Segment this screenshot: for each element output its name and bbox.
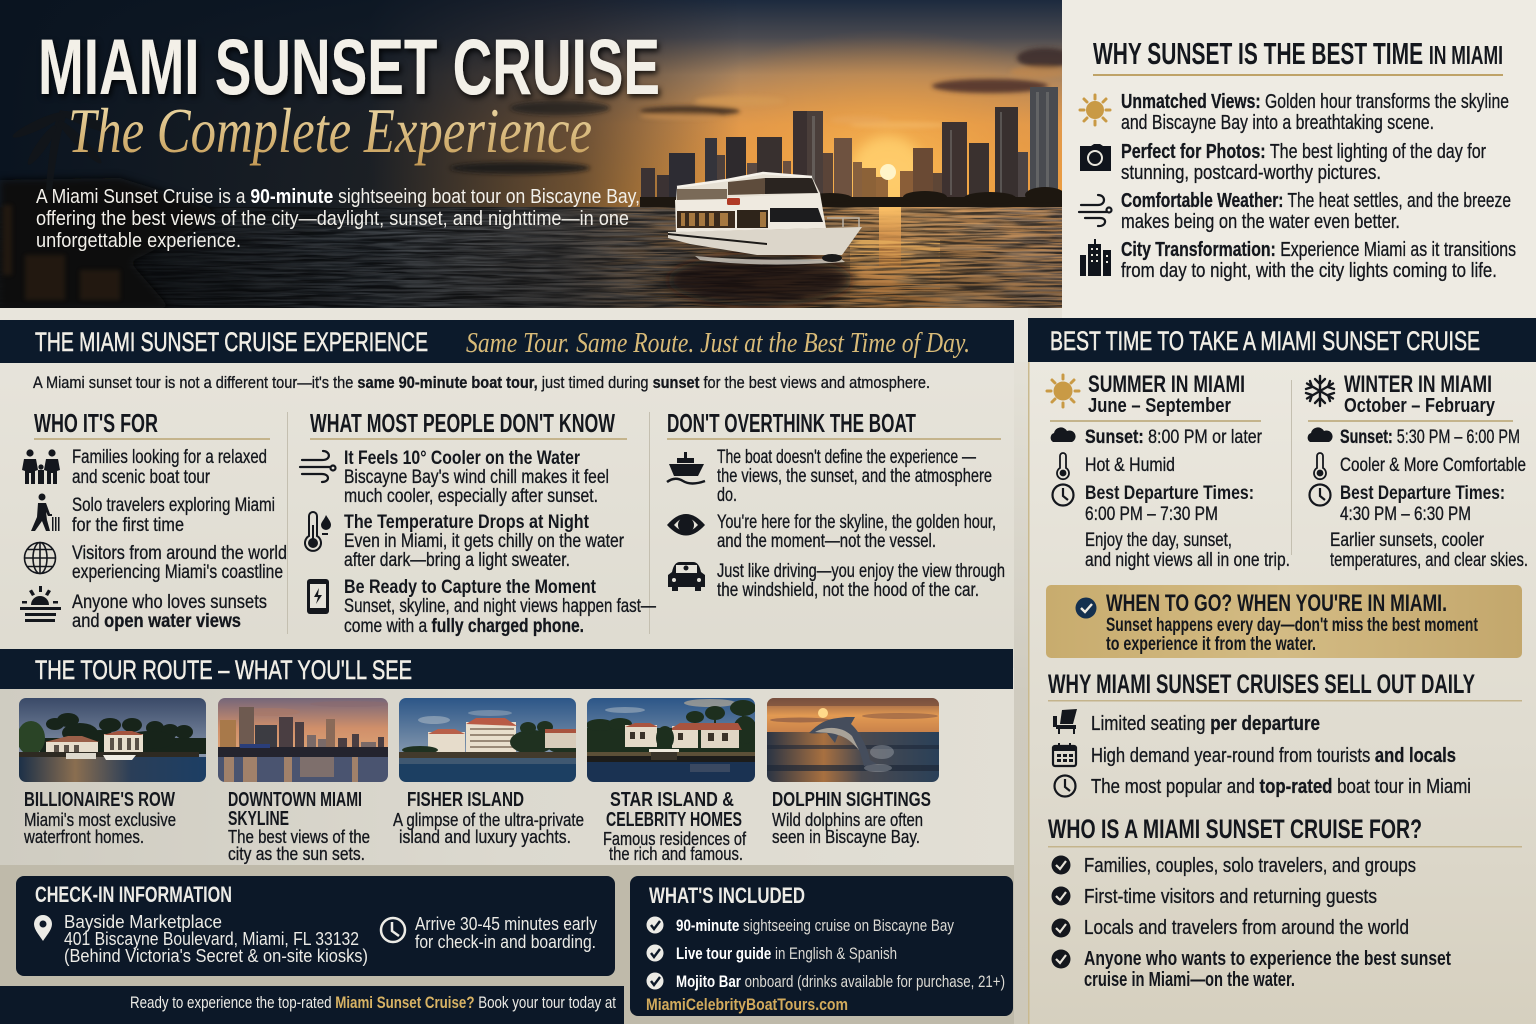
- icon: thermometer: [1057, 453, 1069, 479]
- heading: October – February: [1344, 395, 1496, 417]
- text: just like driving: Just like driving—you enjoy the view through: [717, 561, 1005, 582]
- footer call to action: Ready to experience the top-rated Miami Sunset Cruise? Book your tour today at: [130, 993, 616, 1012]
- photo: dolphin sightings: [767, 698, 939, 782]
- text: cooler on water: much cooler, especially after sunset.: [344, 486, 598, 507]
- item: 90-minute cruise: 90-minute sightseeing cruise on Biscayne Bay: [676, 916, 954, 935]
- text: here for the skyline: and the moment—not the vessel.: [717, 531, 936, 552]
- column: what most people don't know: [300, 408, 656, 637]
- item: unmatched views: and Biscayne Bay into a breathtaking scene.: [1121, 112, 1434, 134]
- icon: clock: [381, 918, 405, 942]
- item: comfortable weather: [1121, 190, 1511, 233]
- bay water: [0, 207, 1062, 308]
- text: capture the moment: come with a fully charged phone.: [344, 616, 584, 637]
- photo: downtown miami skyline: [218, 698, 390, 782]
- subtitle script: The Complete Experience: [68, 95, 592, 166]
- heading: [1308, 371, 1513, 422]
- column heading: DON'T OVERTHINK THE BOAT: [667, 408, 916, 438]
- heading: June – September: [1088, 395, 1231, 417]
- section header: [0, 320, 1014, 363]
- icon: wind: [300, 451, 336, 482]
- text: visitors: Visitors from around the world: [72, 543, 287, 564]
- arrival note: [415, 914, 597, 952]
- caption: star island: [603, 789, 747, 864]
- item: perfect for photos: stunning, postcard-worthy pictures.: [1121, 162, 1381, 184]
- icon: sun: [1080, 95, 1110, 125]
- column: don't overthink the boat: [667, 408, 1005, 601]
- text: capture the moment: [344, 577, 656, 637]
- caption: billionaire's row: Miami's most exclusive: [24, 810, 176, 830]
- text: boat doesn't define: The boat doesn't define the experience —: [717, 447, 976, 468]
- photo: star island: [586, 698, 757, 782]
- caption: fisher island: A glimpse of the ultra-private: [393, 810, 584, 830]
- intro paragraph: unforgettable experience.: [36, 230, 241, 252]
- intro paragraph: [36, 186, 640, 252]
- column: winter: [1306, 371, 1528, 571]
- column heading: WHO IT'S FOR: [34, 408, 158, 438]
- text: boat doesn't define: [717, 447, 992, 506]
- text: visitors: [72, 543, 287, 583]
- column: summer: [1047, 371, 1290, 571]
- intro paragraph: A Miami Sunset Cruise is a 90-minute sightseeing boat tour on Biscayne Bay,: [36, 186, 640, 208]
- wake: [695, 256, 845, 265]
- callout: when to go: [1046, 585, 1522, 658]
- panel: why sunset is the best time: [1079, 36, 1516, 282]
- photo: billionaire's row: [17, 698, 206, 782]
- panel: best time to take a cruise: [1028, 318, 1536, 658]
- sun: [880, 164, 896, 180]
- text: cooler on water: Biscayne Bay's wind chill makes it feel: [344, 467, 609, 488]
- item: live tour guide: Live tour guide in English & Spanish: [676, 944, 897, 963]
- caption: billionaire's row: waterfront homes.: [23, 827, 144, 847]
- text: cooler on water: It Feels 10° Cooler on the Water: [344, 448, 580, 469]
- item: locals and travelers: Locals and travelers from around the world: [1084, 917, 1409, 939]
- website link: MiamiCelebrityBoatTours.com: [646, 995, 848, 1014]
- arrival note: for check-in and boarding.: [415, 932, 596, 952]
- icon: snowflake: [1306, 376, 1334, 406]
- section header: Same Tour. Same Route. Just at the Best Time of Day.: [466, 328, 970, 359]
- text: temperature drops: Even in Miami, it gets chilly on the water: [344, 531, 625, 552]
- caption: star island: STAR ISLAND &: [610, 789, 734, 811]
- item: limited seating: Limited seating per departure: [1091, 713, 1320, 735]
- title: MIAMI SUNSET CRUISE: [38, 22, 660, 111]
- upper deck: [676, 174, 820, 200]
- intro sentence: A Miami sunset tour is not a different tour—it's the same 90-minute boat tour, just timed during sunset for the best views and atmosphere.: [33, 373, 930, 392]
- palm and foliage silhouette: [0, 107, 215, 308]
- text: boat doesn't define: do.: [717, 485, 737, 506]
- icon: clock: [1052, 484, 1074, 506]
- note: [1330, 530, 1528, 571]
- departure times: Best Departure Times:: [1085, 483, 1254, 504]
- sun glow behind skyline: [852, 132, 918, 197]
- icon: sunset: [20, 586, 61, 622]
- text: families: Families looking for a relaxed: [72, 447, 267, 468]
- text: here for the skyline: [717, 512, 996, 552]
- bow rail: [827, 218, 859, 227]
- item: city transformation: [1121, 239, 1516, 282]
- lower windows: [677, 211, 735, 228]
- intro paragraph: offering the best views of the city—daylight, sunset, and nighttime—in one: [36, 208, 629, 230]
- departure times: 6:00 PM – 7:30 PM: [1085, 504, 1218, 525]
- item: families: Families, couples, solo travelers, and groups: [1084, 855, 1416, 877]
- caption: dolphin sightings: DOLPHIN SIGHTINGS: [772, 789, 931, 811]
- text: solo travelers: Solo travelers exploring Miami: [72, 495, 275, 516]
- icon: boat: [667, 452, 705, 484]
- column: who it's for: [20, 408, 287, 632]
- text: sunset lovers: and open water views: [72, 611, 241, 632]
- caption: billionaire's row: [23, 789, 176, 847]
- item: unmatched views: [1121, 91, 1509, 134]
- text: visitors: experiencing Miami's coastline: [72, 562, 283, 583]
- caption: downtown miami skyline: SKYLINE: [228, 808, 289, 830]
- hero banner: [0, 0, 1073, 308]
- caption: dolphin sightings: Wild dolphins are often: [772, 810, 923, 830]
- departure times: 4:30 PM – 6:30 PM: [1340, 504, 1471, 525]
- note: Enjoy the day, sunset,: [1085, 530, 1232, 551]
- caption: billionaire's row: BILLIONAIRE'S ROW: [24, 789, 175, 811]
- text: just like driving: [717, 561, 1005, 601]
- icon: family: [22, 449, 60, 484]
- note: Earlier sunsets, cooler: [1330, 530, 1485, 551]
- text: capture the moment: Sunset, skyline, and night views happen fast—: [344, 596, 656, 617]
- item: comfortable weather: makes being on the water even better.: [1121, 211, 1400, 233]
- address: (Behind Victoria's Secret & on-site kiosks): [64, 946, 368, 966]
- photo: fisher island: [399, 698, 583, 782]
- text: temperature drops: [344, 512, 625, 571]
- section header: THE TOUR ROUTE – WHAT YOU'LL SEE: [35, 655, 412, 685]
- text: sunset lovers: Anyone who loves sunsets: [72, 592, 267, 613]
- section header: [1028, 318, 1536, 362]
- hero photo: sky, skyline, water: [0, 0, 1073, 308]
- main deck wall: [675, 193, 826, 232]
- item: anyone: [1052, 948, 1451, 991]
- icon: wind: [1079, 195, 1112, 226]
- text: families: and scenic boat tour: [72, 467, 211, 488]
- address: [64, 912, 368, 966]
- item: high demand: High demand year-round from tourists and locals: [1091, 745, 1456, 767]
- item: perfect for photos: Perfect for Photos: The best lighting of the day for: [1121, 141, 1486, 163]
- note: [1085, 530, 1290, 571]
- note: and night views all in one trip.: [1085, 550, 1290, 571]
- sunset time: Sunset: 8:00 PM or later: [1085, 427, 1263, 448]
- icon: clock: [1054, 776, 1076, 796]
- text: solo travelers: for the first time: [72, 515, 184, 536]
- heading: WHAT'S INCLUDED: [649, 883, 805, 908]
- item: first-time visitors: First-time visitors and returning guests: [1084, 886, 1377, 908]
- text: just like driving: the windshield, not the hood of the car.: [717, 580, 979, 601]
- caption: star island: CELEBRITY HOMES: [606, 809, 742, 831]
- footer call to action: [0, 986, 624, 1024]
- address: Bayside Marketplace: [64, 912, 222, 932]
- climate: Hot & Humid: [1085, 455, 1175, 476]
- icon: calendar: [1053, 743, 1076, 766]
- panel: the miami sunset cruise experience: [0, 320, 1014, 637]
- panel: what's included: [630, 876, 1013, 1016]
- icon: camera: [1080, 144, 1111, 171]
- text: families: [72, 447, 267, 488]
- heading: CHECK-IN INFORMATION: [35, 882, 232, 907]
- caption: downtown miami skyline: [228, 789, 370, 864]
- column heading: WHAT MOST PEOPLE DON'T KNOW: [310, 408, 615, 438]
- section header: THE MIAMI SUNSET CRUISE EXPERIENCE: [35, 327, 428, 357]
- icon: cloud: [1051, 427, 1076, 442]
- caption: fisher island: [393, 789, 584, 847]
- panel: why cruises sell out: [1048, 669, 1522, 798]
- caption: star island: the rich and famous.: [609, 844, 743, 864]
- icon: car: [668, 562, 705, 591]
- icon: clock: [1310, 484, 1330, 506]
- icon: eye: [667, 514, 705, 536]
- text: solo travelers: [72, 495, 275, 536]
- item: most popular: The most popular and top-rated boat tour in Miami: [1091, 776, 1471, 798]
- section header: [0, 649, 1013, 689]
- heading: SUMMER IN MIAMI: [1088, 371, 1245, 398]
- item: perfect for photos: [1121, 141, 1486, 184]
- icon: thermometer: [1314, 453, 1326, 479]
- icon: thermometer: [305, 512, 331, 551]
- panel: check-in information: [16, 876, 615, 976]
- text: boat doesn't define: the views, the sunset, and the atmosphere: [717, 466, 992, 487]
- icon: cloud: [1308, 427, 1333, 442]
- departure times: [1085, 483, 1254, 525]
- caption: dolphin sightings: [772, 789, 931, 847]
- text: sunset lovers: [72, 592, 267, 632]
- departure times: [1340, 483, 1505, 525]
- hull: [668, 227, 862, 255]
- callout: when to go: to experience it from the water.: [1106, 634, 1316, 655]
- caption: downtown miami skyline: The best views of the: [228, 827, 370, 847]
- caption: fisher island: island and luxury yachts.: [399, 827, 571, 847]
- caption: fisher island: FISHER ISLAND: [407, 789, 524, 811]
- item: anyone: cruise in Miami—on the water.: [1084, 969, 1295, 991]
- sign: [727, 198, 740, 205]
- icon: solo traveler: [31, 494, 60, 531]
- text: capture the moment: Be Ready to Capture the Moment: [344, 577, 597, 598]
- icon: city: [1080, 239, 1111, 276]
- item: mojito bar: Mojito Bar onboard (drinks available for purchase, 21+): [676, 972, 1005, 991]
- caption: star island: Famous residences of: [603, 829, 747, 849]
- panel: who is a cruise for: [1048, 814, 1522, 991]
- text: cooler on water: [344, 448, 609, 507]
- icon: location pin: [34, 915, 52, 941]
- icon: sun: [1047, 375, 1079, 407]
- text: temperature drops: after dark—bring a light sweater.: [344, 550, 570, 571]
- address: 401 Biscayne Boulevard, Miami, FL 33132: [64, 929, 359, 949]
- cruise boat: [668, 173, 862, 265]
- icon: globe: [24, 542, 56, 574]
- caption: downtown miami skyline: city as the sun sets.: [228, 844, 365, 864]
- caption: downtown miami skyline: DOWNTOWN MIAMI: [228, 789, 362, 811]
- panel: tour route: [0, 649, 1013, 864]
- icon: seat: [1053, 709, 1077, 734]
- text: here for the skyline: You're here for the skyline, the golden hour,: [717, 512, 996, 533]
- icon: phone: [307, 579, 329, 614]
- arrival note: Arrive 30-45 minutes early: [415, 914, 597, 934]
- heading: [1050, 371, 1261, 422]
- text: temperature drops: The Temperature Drops at Night: [344, 512, 590, 533]
- caption: dolphin sightings: seen in Biscayne Bay.: [772, 827, 920, 847]
